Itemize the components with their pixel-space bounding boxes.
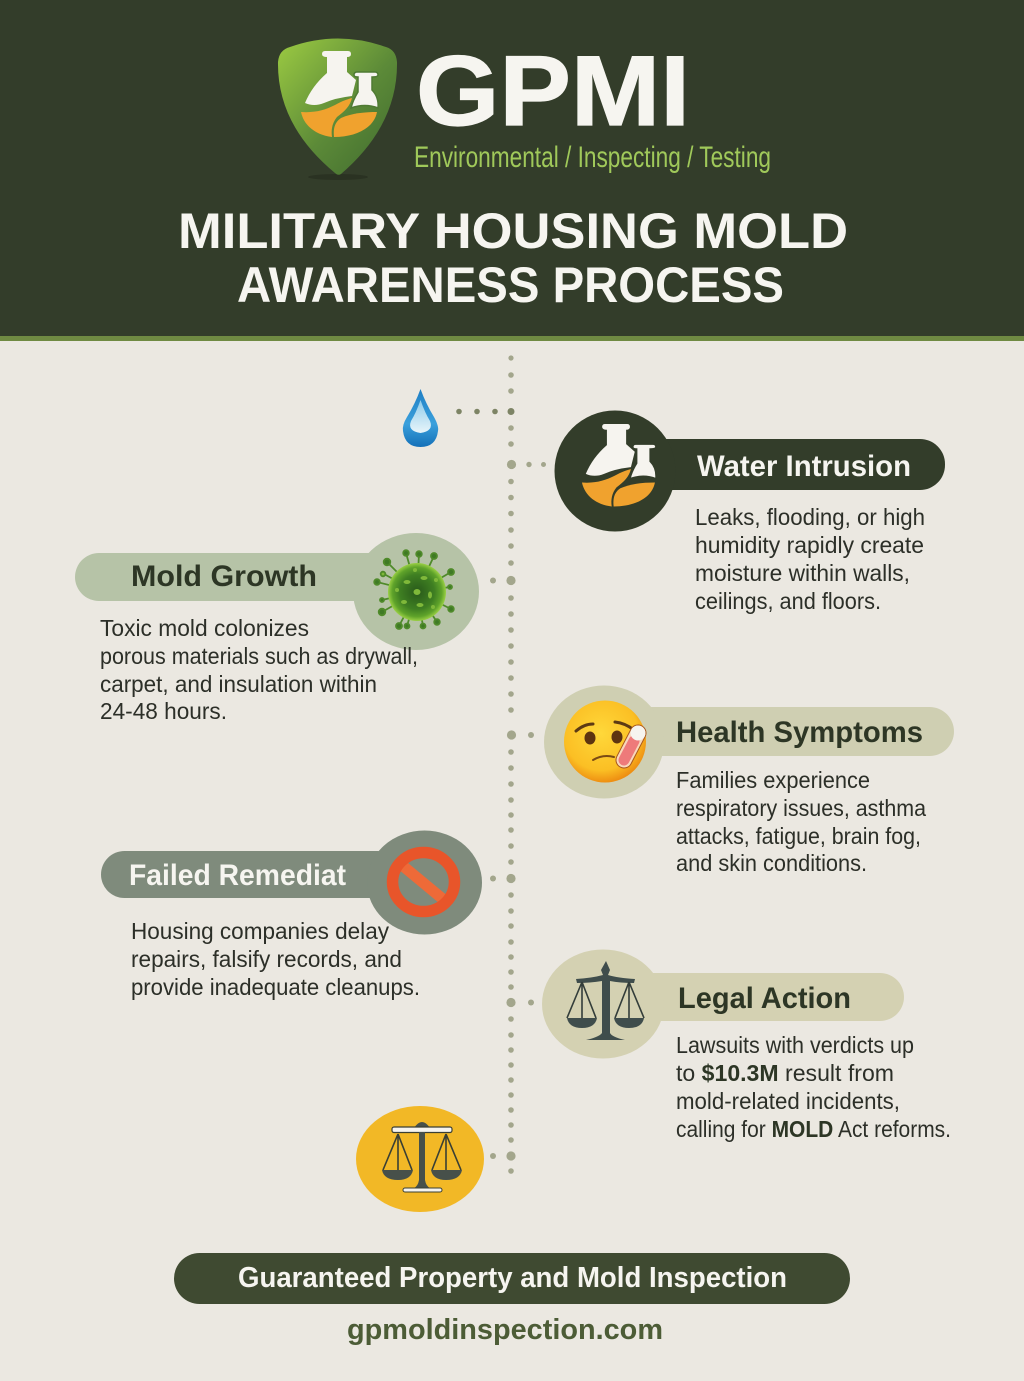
legal action circle: [542, 950, 664, 1058]
website url: gpmoldinspection.com: [347, 1314, 663, 1346]
failed remediation text: [131, 918, 420, 1000]
panel: mold growth: [75, 533, 479, 724]
icon: scales on yellow circle: [356, 1106, 484, 1212]
logo wordmark GPMI: GPMI: [416, 35, 690, 146]
mold growth text: 24-48 hours.: [100, 698, 227, 724]
logo tagline: Environmental / Inspecting / Testing: [414, 141, 771, 174]
health symptoms text: [676, 767, 926, 876]
water intrusion text: ceilings, and floors.: [695, 588, 881, 614]
water intrusion heading: Water Intrusion: [697, 450, 911, 483]
logo shield icon: [278, 38, 397, 180]
mold growth header pill: [75, 553, 395, 601]
mold growth text: carpet, and insulation within: [100, 671, 377, 697]
icon: prohibited sign: [392, 852, 454, 912]
title: MILITARY HOUSING MOLD: [178, 203, 848, 259]
water intrusion text: humidity rapidly create: [695, 532, 924, 558]
mold growth circle: [353, 533, 479, 650]
failed remediation text: provide inadequate cleanups.: [131, 974, 420, 1000]
failed remediation text: repairs, falsify records, and: [131, 946, 402, 972]
mold growth text: porous materials such as drywall,: [100, 643, 418, 669]
mold growth heading: Mold Growth: [131, 560, 317, 593]
health symptoms text: respiratory issues, asthma: [676, 795, 926, 821]
panel: water intrusion: [554, 410, 945, 614]
icon: flasks: [582, 424, 656, 507]
legal action text: mold-related incidents,: [676, 1088, 900, 1114]
panel: failed remediation: [101, 830, 482, 1000]
health symptoms header pill: [620, 707, 954, 756]
health symptoms heading: Health Symptoms: [676, 716, 923, 749]
legal action text: to $10.3M result from: [676, 1060, 894, 1086]
health symptoms text: attacks, fatigue, brain fog,: [676, 823, 921, 849]
icon: mold spore: [374, 550, 454, 629]
water intrusion header pill: [640, 439, 945, 490]
legal action text: [676, 1032, 951, 1142]
mold growth text: Toxic mold colonizes: [100, 615, 309, 641]
title: [178, 203, 848, 313]
panel: legal action: [542, 950, 951, 1142]
water intrusion circle: [554, 410, 676, 532]
header band: [0, 0, 1024, 341]
title: AWARENESS PROCESS: [237, 257, 784, 313]
icon: water drop: [403, 389, 438, 447]
footer text: Guaranteed Property and Mold Inspection: [238, 1262, 787, 1294]
icon: sick face: [564, 700, 646, 782]
water intrusion text: Leaks, flooding, or high: [695, 504, 925, 530]
branch dots: [456, 409, 462, 414]
mold growth text: [100, 615, 418, 724]
water intrusion text: [695, 504, 925, 614]
health symptoms text: and skin conditions.: [676, 850, 867, 876]
failed remediation text: Housing companies delay: [131, 918, 389, 944]
failed remediation heading: Failed Remediat: [129, 859, 346, 892]
water intrusion text: moisture within walls,: [695, 560, 910, 586]
failed remediation circle: [367, 830, 482, 934]
legal action text: Lawsuits with verdicts up: [676, 1032, 914, 1058]
icon: scales of justice: [567, 961, 644, 1040]
legal action heading: Legal Action: [678, 982, 851, 1015]
failed remediation header pill: [101, 851, 401, 898]
health symptoms text: Families experience: [676, 767, 870, 793]
health symptoms circle: [544, 686, 664, 798]
legal action header pill: [630, 973, 904, 1021]
dotted timeline: [456, 355, 546, 1174]
panel: health symptoms: [544, 686, 954, 876]
legal action text: calling for MOLD Act reforms.: [676, 1116, 951, 1142]
footer pill: [174, 1253, 850, 1304]
